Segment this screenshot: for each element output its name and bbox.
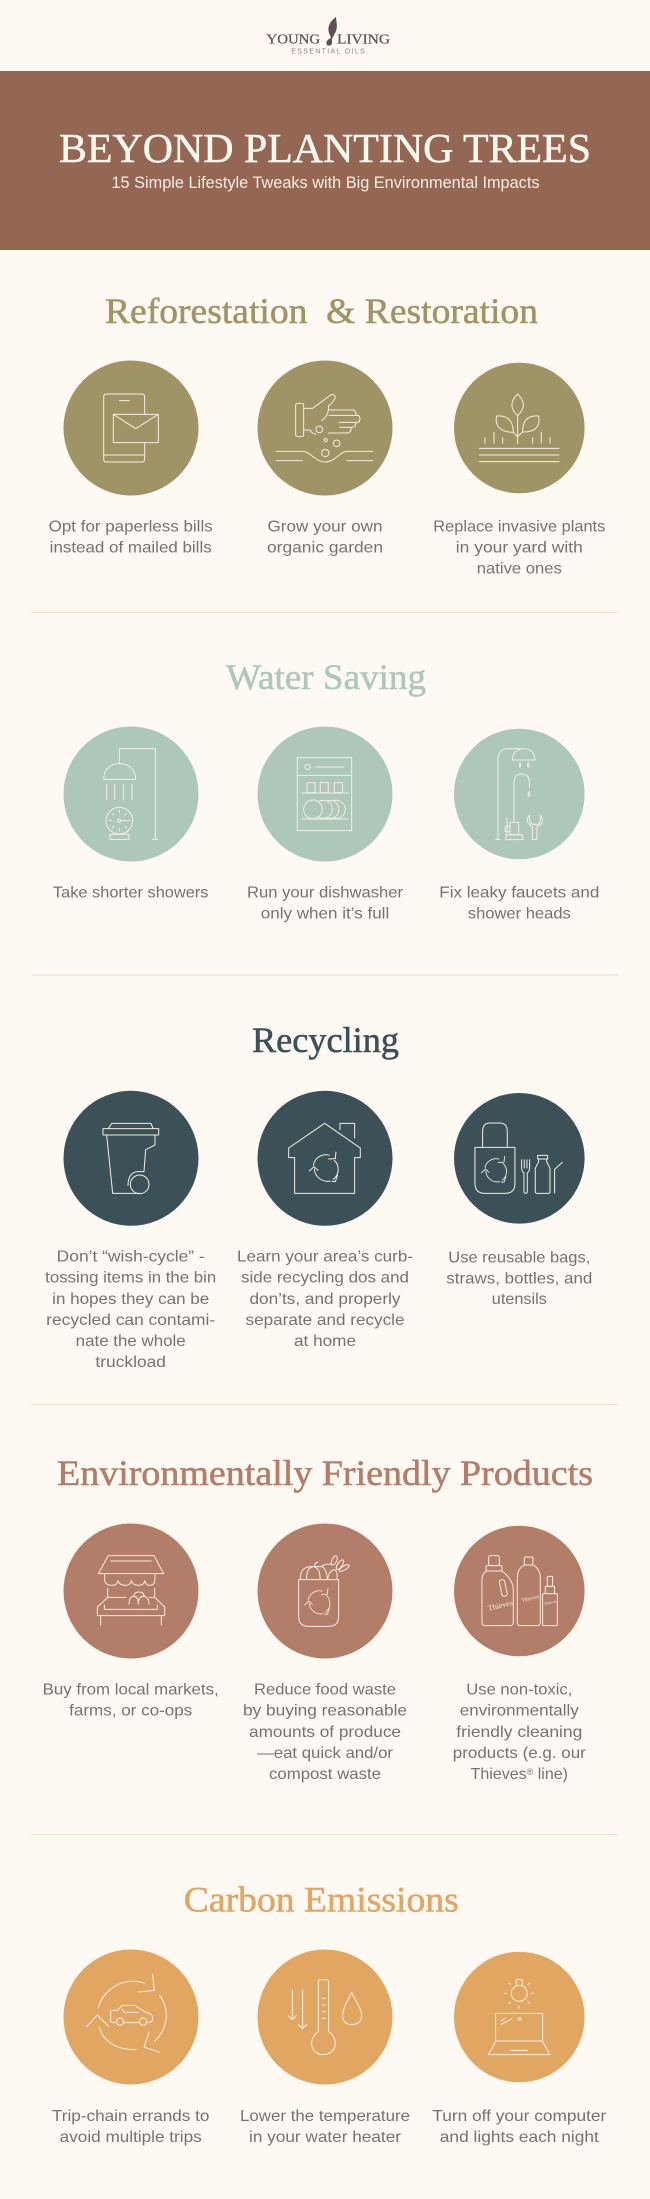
tip text: instead of mailed bills [50, 540, 212, 557]
tip text [453, 1682, 587, 1783]
tip text: Use non-toxic, [466, 1682, 572, 1699]
icon: thermometer and drop [258, 1950, 392, 2084]
heading: Water Saving [226, 657, 426, 697]
tip text: don’ts, and properly [250, 1291, 400, 1308]
tip text [433, 519, 605, 578]
tip text: Opt for paperless bills [49, 519, 213, 536]
tip text: amounts of produce [249, 1724, 401, 1741]
tip text: Buy from local markets, [43, 1682, 219, 1699]
icon: market stall [64, 1524, 198, 1658]
tip text [446, 1250, 592, 1308]
tip: reusables [446, 1093, 592, 1308]
tip text: in your yard with [456, 540, 583, 557]
tip text: —eat quick and/or [257, 1745, 394, 1762]
panel: Reforestation and Restoration [49, 291, 605, 578]
logo: YOUNG [267, 32, 320, 47]
tip text: straws, bottles, and [446, 1271, 592, 1288]
tip text: Lower the temperature [240, 2108, 410, 2125]
icon: Thieves cleaning bottles: Thieves [543, 1598, 557, 1606]
tip text: friendly cleaning [456, 1724, 582, 1741]
tip text: at home [294, 1333, 356, 1350]
panel: Environmentally Friendly Products [43, 1453, 593, 1783]
tip text: side recycling dos and [241, 1270, 409, 1287]
tip: shorter showers [53, 726, 208, 902]
tip text: Run your dishwasher [247, 885, 404, 902]
tip text: Grow your own [268, 519, 382, 536]
tip: organic garden [258, 360, 392, 557]
tip text: shower heads [468, 906, 571, 923]
tip text [267, 519, 383, 557]
tip text [49, 519, 213, 557]
tip text: and lights each night [440, 2129, 599, 2146]
tip text: Learn your area’s curb- [237, 1249, 413, 1266]
icon: Thieves cleaning bottles: Thieves [487, 1598, 514, 1613]
tip: full dishwasher [247, 726, 404, 923]
tip text [439, 885, 599, 923]
tip: paperless bills [49, 360, 213, 557]
tip: computer and lights off [432, 1952, 607, 2146]
icon: faucet, shower and wrench [454, 729, 585, 859]
heading: Carbon Emissions [184, 1880, 459, 1920]
tip text: utensils [492, 1291, 547, 1308]
icon: car in circular arrows [64, 1950, 198, 2084]
tip: curbside recycling [237, 1091, 413, 1350]
tip text: in your water heater [249, 2129, 402, 2146]
icon: hand sowing seeds [258, 360, 392, 496]
icon: Thieves cleaning bottles: Thieves [521, 1594, 540, 1604]
tip text: compost waste [269, 1766, 381, 1783]
tip text [243, 1682, 407, 1783]
tip text: Replace invasive plants [433, 519, 605, 536]
tip text: tossing items in the bin [45, 1270, 216, 1287]
tip: wish-cycle [45, 1091, 216, 1371]
icon: sprout [454, 363, 585, 493]
banner [0, 71, 650, 250]
logo [267, 17, 390, 55]
tip: water heater [240, 1950, 410, 2146]
icon: shower and timer [64, 726, 198, 862]
panel: Recycling [45, 1020, 592, 1371]
tip text: Use reusable bags, [448, 1250, 590, 1267]
tip text [43, 1682, 219, 1720]
tip text: nate the whole [76, 1333, 186, 1350]
tip text: truckload [95, 1354, 166, 1371]
tip text [237, 1249, 413, 1350]
icon: wheeled bin [64, 1091, 198, 1226]
tip text [52, 2108, 210, 2146]
icon: tote, fork, bottle and straw [454, 1093, 585, 1224]
tip: leaky faucets [439, 729, 599, 923]
tip text: recycled can contami- [46, 1312, 215, 1329]
panel: Water Saving [53, 657, 599, 923]
tip text [45, 1249, 216, 1371]
tip text: in hopes they can be [52, 1291, 209, 1308]
heading: Recycling [252, 1020, 399, 1060]
logo: LIVING [337, 32, 390, 47]
tip text: Fix leaky faucets and [439, 885, 599, 902]
tip text: ® [527, 1767, 534, 1777]
tip text [432, 2108, 607, 2146]
tip: food waste [243, 1524, 407, 1783]
tip text [247, 885, 404, 923]
icon: dishwasher [258, 726, 392, 862]
tip: non-toxic cleaners [453, 1526, 587, 1783]
tip text: by buying reasonable [243, 1703, 407, 1720]
tip text: Trip-chain errands to [52, 2108, 210, 2125]
tip text: only when it’s full [261, 906, 389, 923]
tip text: line) [533, 1766, 568, 1783]
tip text: organic garden [267, 540, 383, 557]
tip text: Take shorter showers [53, 885, 208, 902]
icon: Thieves cleaning bottles [454, 1526, 585, 1656]
tip: local markets [43, 1524, 219, 1720]
tip text: native ones [477, 561, 562, 578]
tip text [240, 2108, 410, 2146]
icon: produce bag [258, 1524, 392, 1658]
logo: ESSENTIAL OILS [291, 48, 365, 55]
tip text: avoid multiple trips [60, 2129, 202, 2146]
tip text: Thieves [471, 1766, 527, 1783]
panel: Carbon Emissions [52, 1880, 607, 2146]
tip text: Don’t “wish-cycle” - [57, 1249, 205, 1266]
icon: laptop and light bulb [454, 1952, 585, 2082]
tip text: environmentally [460, 1703, 579, 1720]
tip text: Turn off your computer [432, 2108, 607, 2125]
tip text: Reduce food waste [254, 1682, 396, 1699]
icon: house with recycling arrows [258, 1091, 392, 1226]
heading: Reforestation & Restoration [105, 291, 538, 331]
subtitle: 15 Simple Lifestyle Tweaks with Big Environmental Impacts [112, 173, 540, 192]
tip text: farms, or co-ops [69, 1703, 192, 1720]
tip: trip-chain errands [52, 1950, 210, 2146]
heading: Environmentally Friendly Products [57, 1453, 593, 1493]
tip text: separate and recycle [246, 1312, 405, 1329]
tip: native plants [433, 363, 605, 578]
title: BEYOND PLANTING TREES [59, 125, 591, 171]
icon: phone and envelope [64, 360, 198, 496]
tip text: products (e.g. our [453, 1745, 587, 1762]
